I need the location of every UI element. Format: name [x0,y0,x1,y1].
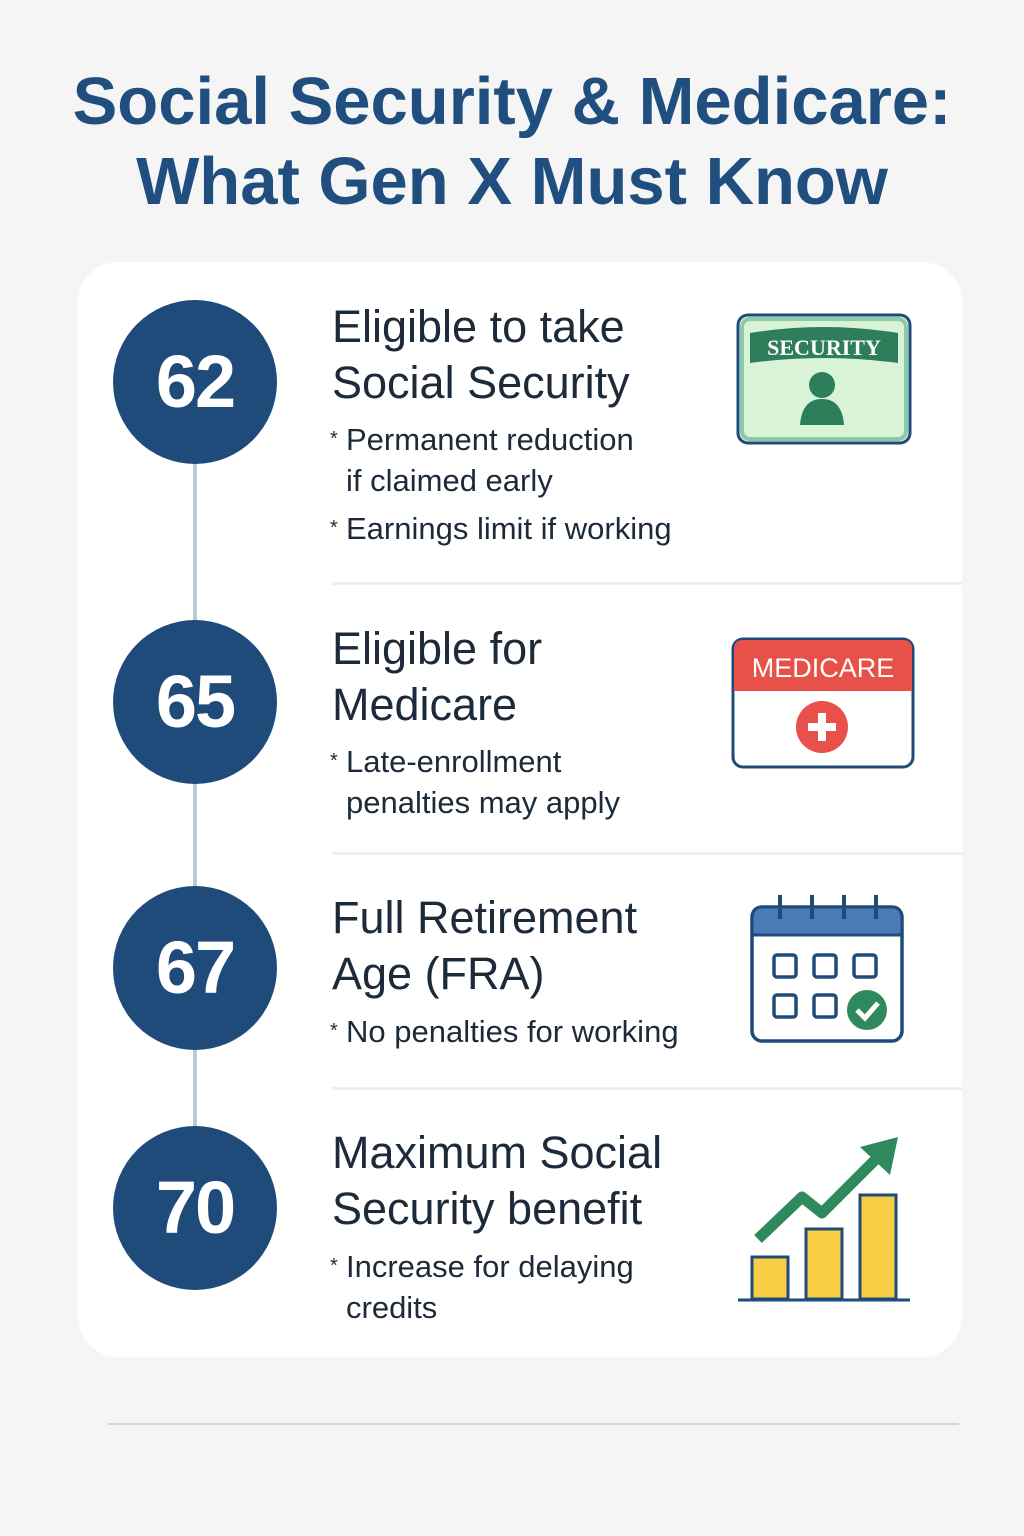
circle 65: 65 [156,660,234,743]
footer line [108,1423,959,1425]
icon: security card [736,314,912,444]
circle 62 [113,300,277,464]
bullets 62: Earnings limit if working [346,511,672,546]
heading 67: Full Retirement [332,892,637,943]
icon: growth chart [738,1137,910,1302]
icon: medicare card [732,638,914,768]
bullets 65: penalties may apply [346,785,620,820]
icon: medicare card: MEDICARE [752,653,894,683]
heading 70: Security benefit [332,1183,642,1234]
circle 70 [113,1126,277,1290]
heading 62: Social Security [332,357,630,408]
circle 67: 67 [156,926,234,1009]
circle 67 [113,886,277,1050]
circle 65 [113,620,277,784]
bullets 67: * [330,1020,338,1042]
bullets 70 [330,1249,634,1325]
bullets 65: * [330,750,338,772]
title [73,64,951,219]
bullets 65: Late-enrollment [346,744,561,779]
heading 70: Maximum Social [332,1127,662,1178]
bullets 62: * [330,517,338,539]
heading 62: Eligible to take [332,301,625,352]
card panel [78,262,962,1357]
heading 70 [332,1127,662,1234]
heading 65: Medicare [332,679,517,730]
bullets 62 [330,422,672,546]
bullets 70: * [330,1255,338,1277]
bullets 62: Permanent reduction [346,422,634,457]
heading 67 [332,892,637,999]
bullets 70: Increase for delaying [346,1249,634,1284]
heading 65: Eligible for [332,623,542,674]
title: Social Security & Medicare: [73,64,951,139]
icon: calendar [750,895,904,1043]
title: What Gen X Must Know [136,144,888,219]
bullets 62: * [330,428,338,450]
circle 70: 70 [156,1166,234,1249]
heading 62 [332,301,630,408]
circle 62: 62 [156,340,234,423]
bullets 67: No penalties for working [346,1014,679,1049]
heading 65 [332,623,542,730]
timeline connector [193,440,197,1160]
bullets 70: credits [346,1290,437,1325]
bullets 65 [330,744,620,820]
heading 67: Age (FRA) [332,948,545,999]
bullets 62: if claimed early [346,463,553,498]
icon: security card: SECURITY [767,335,881,360]
